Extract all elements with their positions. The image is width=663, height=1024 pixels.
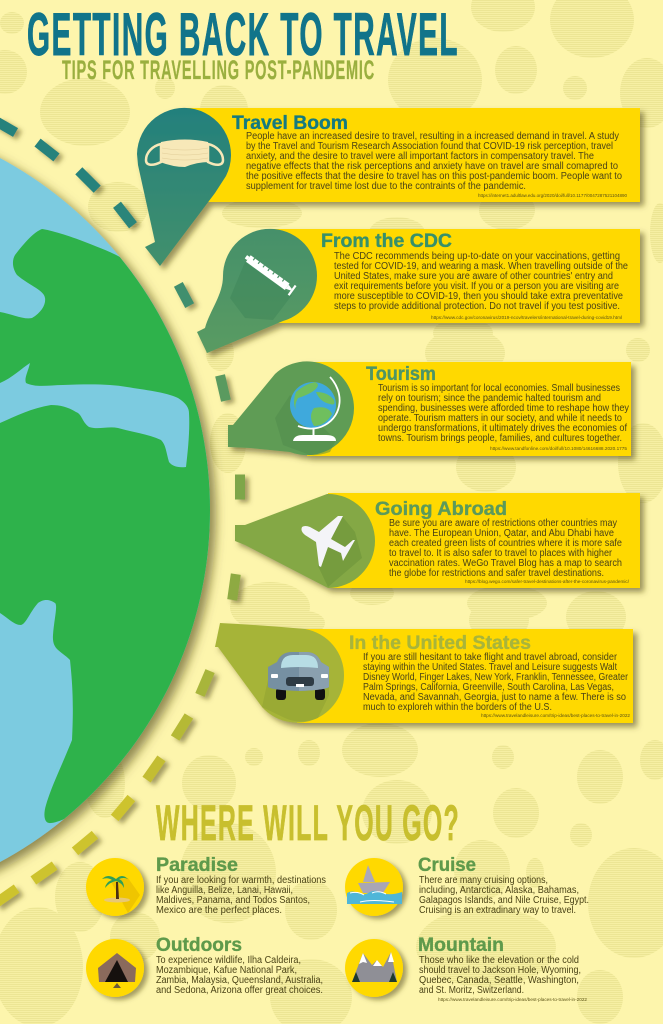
source link: https://www.cdc.gov/coronavirus/2019-ncov/travelers/international-travel-during-covid19.html — [431, 315, 622, 320]
body text: To experience wildlife, Ilha Caldeira, — [156, 955, 301, 966]
source link: https://www.tandfonline.com/doi/full/10.1080/14616688.2020.1775 — [490, 446, 628, 451]
body text — [156, 955, 323, 996]
body text: Zambia, Malaysia, Queensland, Australia, — [156, 975, 323, 986]
heading: Paradise — [156, 855, 238, 876]
source link: https://www.travelandleisure.com/trip-ideas/best-places-to-travel-in-2022 — [438, 997, 588, 1002]
body text: There are many cruising options, — [419, 875, 548, 886]
icon: palm tree — [86, 858, 144, 916]
heading: Going Abroad — [375, 499, 507, 520]
source link: https://blog.wego.com/safer-travel-destinations-after-the-coronavirus-pandemic/ — [465, 579, 630, 584]
body text: Mexico are the perfect places. — [156, 905, 282, 916]
panel: Cruise — [345, 855, 589, 916]
body text: undergo transformations, it ultimately drives the economies of — [378, 423, 627, 434]
body text — [378, 383, 629, 444]
icon: mountains — [345, 939, 403, 997]
body text: staying within the United States. Travel and Leisure suggests Walt — [363, 662, 617, 673]
body text: Palm Springs, California, Greenville, South Carolina, Las Vegas, — [363, 682, 614, 693]
heading: Outdoors — [156, 935, 242, 956]
body text: Quebec, Canada, Seattle, Washington, — [419, 975, 579, 986]
heading: Mountain — [418, 935, 504, 956]
icon: car — [262, 652, 329, 722]
panel: Outdoors — [86, 935, 323, 997]
icon: face mask — [146, 140, 223, 167]
body text: and Sedona, Arizona offer great choices. — [156, 985, 323, 996]
body text: Mozambique, Kafue National Park, — [156, 965, 297, 976]
heading: Travel Boom — [232, 113, 348, 134]
panel: Tourism — [228, 361, 631, 456]
source link: https://www.travelandleisure.com/trip-ideas/best-places-to-travel-in-2022 — [481, 713, 631, 718]
panel: Mountain — [345, 935, 588, 1002]
icon: tent — [86, 939, 144, 997]
heading: In the United States — [349, 633, 531, 654]
body text — [156, 875, 326, 916]
heading: Tourism — [366, 364, 436, 385]
subtitle: TIPS FOR TRAVELLING POST-PANDEMIC — [62, 55, 375, 85]
panel: Travel Boom — [137, 108, 640, 266]
body text: Those who like the elevation or the cold — [419, 955, 579, 966]
body text: The CDC recommends being up-to-date on your vaccinations, getting — [334, 251, 620, 262]
body text: Galapagos Islands, and Nile Cruise, Egypt. — [419, 895, 589, 906]
body text: tested for COVID-19, and wearing a mask. When travelling outside of the — [334, 261, 628, 272]
body text: anxiety, and the desire to travel were all important factors in compensatory travel. The — [246, 151, 594, 162]
body text: rely on tourism; since the pandemic halted tourism and — [378, 393, 601, 404]
body text: by the Travel and Tourism Research Association found that COVID-19 risk perception, travel — [246, 141, 613, 152]
body text — [419, 875, 589, 916]
panel: In the United States — [215, 623, 633, 723]
body text: People have an increased desire to travel, resulting in a increased demand in travel. A study — [246, 131, 619, 142]
body text: the globe for restrictions and safer travel destinations. — [389, 568, 604, 579]
body text: should travel to Jackson Hole, Wyoming, — [419, 965, 581, 976]
body text: have. The European Union, Qatar, and Abu Dhabi have — [389, 528, 614, 539]
body text: and St. Moritz, Switzerland. — [419, 985, 524, 996]
body text: Tourism is so important for local economies. Small businesses — [378, 383, 620, 394]
body text — [334, 251, 628, 312]
body text: If you are still hesitant to take flight and travel abroad, consider — [363, 652, 618, 663]
body text: negative effects that the risk perceptions and anxiety have on travel are small comapred to — [246, 161, 618, 172]
body text: like Anguilla, Belize, Lanai, Hawaii, — [156, 885, 293, 896]
body text: operate. Tourism matters in our society, and while it needs to — [378, 413, 622, 424]
icon: airplane — [301, 516, 362, 587]
body text: Maldives, Panama, and Todos Santos, — [156, 895, 310, 906]
body text — [363, 652, 629, 713]
body text: steps to provide additional protection. Do not travel if you test positive. — [334, 301, 620, 312]
body text: Cruising is an extradinary way to travel. — [419, 905, 576, 916]
body text: towns. Tourism brings people, families, and cultures together. — [378, 433, 622, 444]
body text: Nevada, and Savannah, Georgia, just to name a few. There is so — [363, 692, 626, 703]
body text — [419, 955, 581, 996]
body text: to travel to. It is also safer to travel to places with higher — [389, 548, 613, 559]
icon: boat — [345, 858, 403, 916]
body text: much to exploreh within the borders of the U.S. — [363, 702, 552, 713]
body text: Disney World, Finger Lakes, New York, Franklin, Tennessee, Greater — [363, 672, 629, 683]
body text — [246, 131, 622, 192]
body text: Be sure you are aware of restrictions other countries may — [389, 518, 617, 529]
body text: more susceptible to COVID-19, then you should take extra preventative — [334, 291, 623, 302]
dashed flight path — [0, 117, 245, 908]
icon: syringe — [230, 252, 297, 320]
body text: including, Antarctica, Alaska, Bahamas, — [419, 885, 579, 896]
panel: From the CDC — [197, 229, 640, 353]
body text — [389, 518, 622, 579]
heading: Cruise — [418, 855, 476, 876]
body text: spending, businesses were afforded time to reshape how they — [378, 403, 629, 414]
body text: supplement for travel time lost due to the contraints of the pandemic. — [246, 181, 526, 192]
heading: From the CDC — [321, 231, 452, 252]
body text: vaccination rates. WeGo Travel Blog has a map to search — [389, 558, 622, 569]
icon: desk globe — [275, 377, 340, 455]
source link: https://internet1.adultlaw.edu.org/2020/doi/full/10.1177/0047287521104890 — [478, 193, 627, 198]
panel: Paradise — [86, 855, 326, 916]
body text: exit requirements before you visit. If you or a person you are visiting are — [334, 281, 619, 292]
panel: Going Abroad — [235, 493, 640, 588]
body text: each created green lists of countries where it is more safe — [389, 538, 622, 549]
body text: United States, make sure you are aware of other countries' entry and — [334, 271, 613, 282]
globe — [0, 152, 223, 878]
body text: If you are looking for warmth, destinations — [156, 875, 326, 886]
body text: the positive effects that the desire to travel has on this post-pandemic boom. People want to — [246, 171, 622, 182]
